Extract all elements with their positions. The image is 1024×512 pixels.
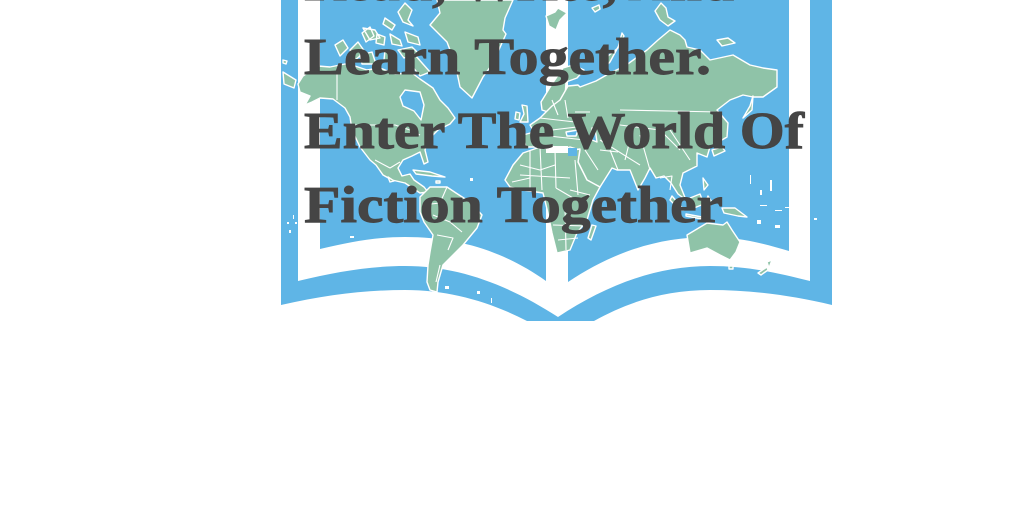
right page: [568, 0, 789, 282]
landmass: United Kingdom and Ireland: [515, 105, 528, 122]
landmass: Scandinavia: [541, 65, 584, 112]
world map: [283, 0, 817, 303]
landmass: Tasmania: [729, 266, 733, 269]
landmass: Japan: [712, 96, 753, 156]
water: Mediterranean: [546, 146, 568, 153]
landmass: Iceland: [546, 8, 567, 30]
landmass: South America: [420, 187, 482, 292]
heading line: Fiction Together: Fiction Together: [304, 177, 723, 234]
landmass: Arctic islands: [302, 3, 430, 80]
landmass: Alaska peninsula islands: [283, 60, 296, 88]
landmass: Southeast Asia islands: [670, 178, 747, 219]
heading line: Enter The World Of: Enter The World Of: [304, 103, 805, 160]
landmass: Madagascar: [588, 225, 596, 240]
landmass: Eurasia: [523, 30, 777, 200]
landmass: Caribbean: [388, 170, 445, 183]
tiny islands: [287, 175, 817, 303]
water: Black Sea and Caspian: [566, 128, 597, 142]
landmass: Arctic Russia islands: [592, 3, 735, 68]
heading: [304, 0, 805, 234]
book page outline: [298, 0, 810, 317]
landmass: Africa: [505, 147, 600, 253]
landmass: North America: [298, 64, 455, 193]
book cover: [281, 0, 832, 321]
icon: open book: [281, 0, 832, 321]
landmass: Australia: [687, 222, 740, 260]
heading line: Learn Together.: Learn Together.: [304, 29, 711, 86]
water: Hudson Bay: [400, 90, 424, 120]
left page: [320, 0, 546, 281]
landmass: New Zealand: [758, 260, 772, 275]
landmass: Greenland: [430, 0, 513, 98]
country borders: [337, 70, 720, 282]
water: eastern Mediterranean: [568, 148, 577, 156]
